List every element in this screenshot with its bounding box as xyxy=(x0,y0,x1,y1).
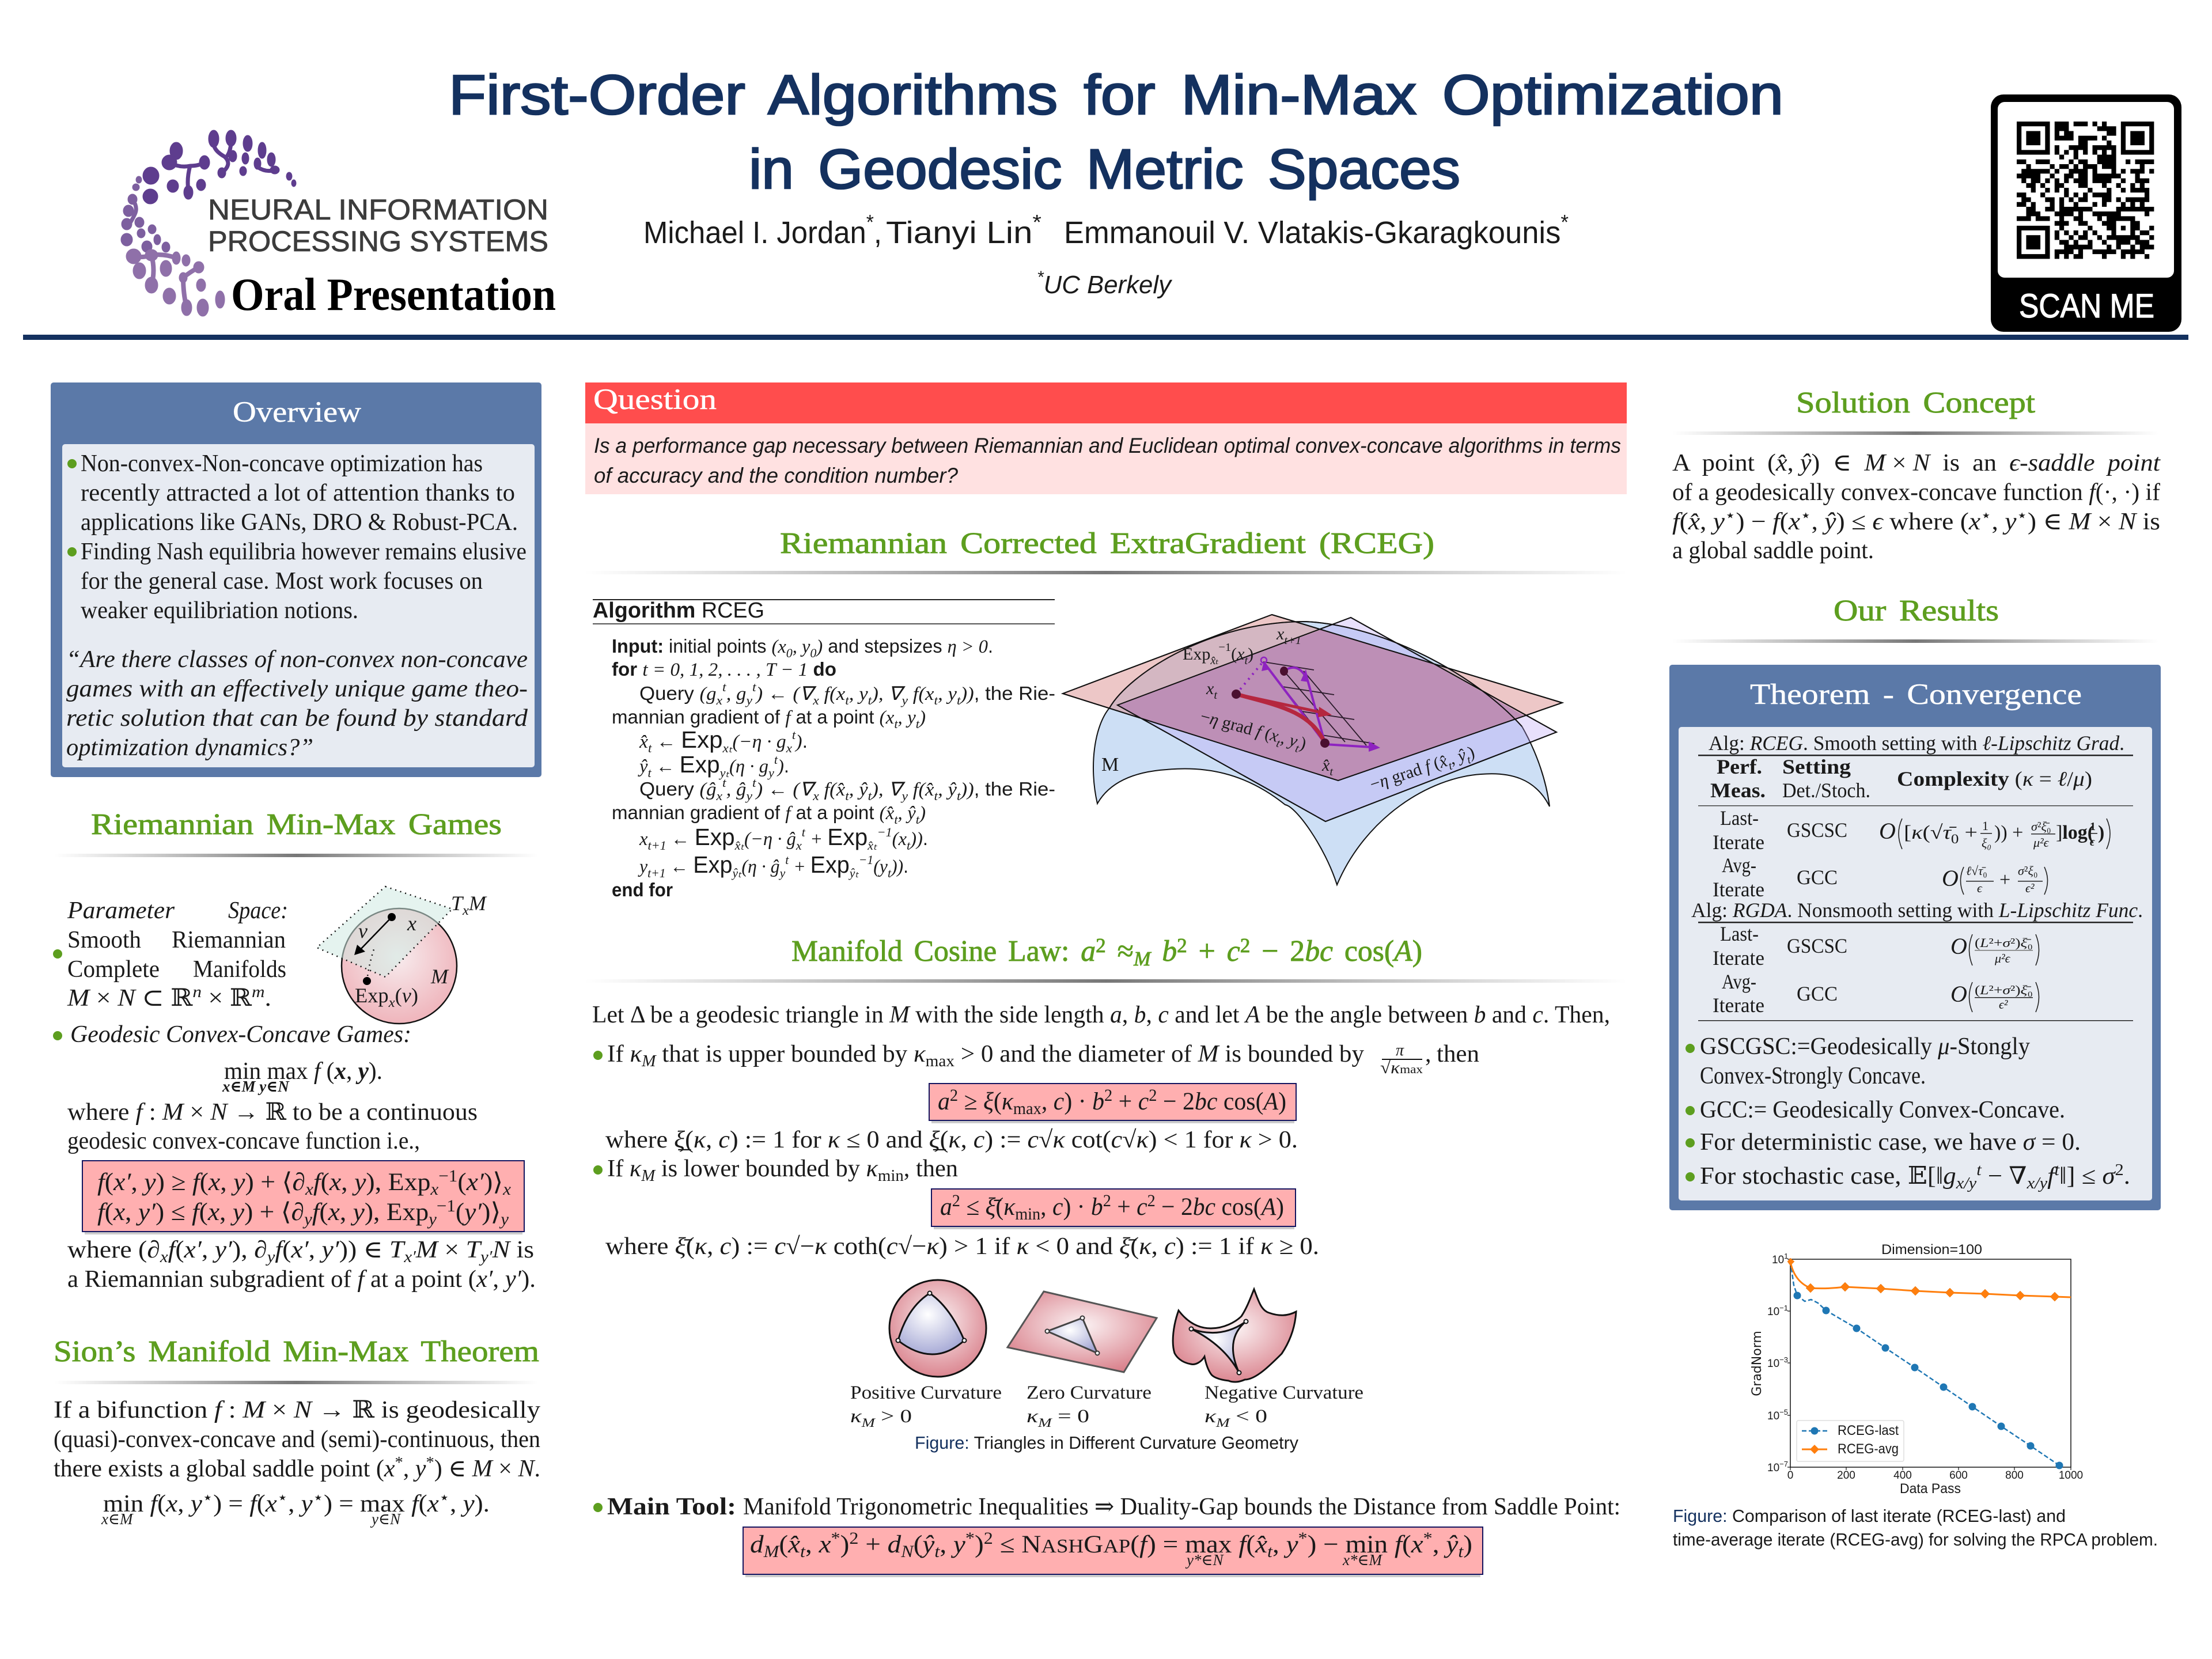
overview bullets: for the general case. Most work focuses on xyxy=(81,568,483,594)
diagram labels: xt xyxy=(1206,679,1218,702)
heading: Our Results: Our Results xyxy=(1834,594,1999,627)
axis titles: Data Pass xyxy=(1900,1481,1961,1497)
table: complexity results: Meas. xyxy=(1710,779,1766,802)
table: complexity results: Iterate xyxy=(1713,946,1764,969)
diagram labels: xt+1 xyxy=(1276,624,1301,647)
algorithm steps: end for xyxy=(612,879,673,900)
text: upper bound xyxy=(593,1041,1479,1077)
icon: sphere with tangent plane: v xyxy=(358,919,368,942)
panel: algorithm RCEG xyxy=(593,599,1055,900)
algorithm steps: yt+1 ← Expŷₜ(η · ĝyt + Expŷₜ−1(yt)). xyxy=(638,851,908,880)
logo: NeurIPS oral presentation xyxy=(122,131,556,320)
axis tick labels xyxy=(1767,1252,2083,1482)
authors: Michael I. Jordan*, xyxy=(643,210,882,250)
text: Sion's theorem statement: min f(x, y⋆) = f(x⋆, y⋆) = max f(x⋆, y). xyxy=(103,1489,490,1517)
text: Sion's theorem statement: If a bifunction f : M × N → ℝ is geodesically xyxy=(54,1397,540,1423)
diagram labels: −η grad f (xt, yt) xyxy=(1198,707,1308,756)
text: Sion's theorem statement: x∈M xyxy=(101,1510,134,1528)
algorithm title: Algorithm RCEG xyxy=(593,599,764,623)
diagram labels: M xyxy=(1101,754,1119,775)
logo text: PROCESSING SYSTEMS xyxy=(208,225,548,257)
callout: duality gap inequality: x*∈M xyxy=(1342,1551,1382,1569)
figure: RCEG manifold diagram xyxy=(1063,615,1562,885)
algorithm steps: Query (gxt, gyt) ← (∇x f(xt, yt), ∇y f(xt, yt)), the Rie- xyxy=(639,680,1055,707)
table: complexity results: Perf. xyxy=(1717,755,1762,778)
formula: last iterate, smooth: ) xyxy=(2098,822,2104,843)
algorithm steps xyxy=(612,635,1055,900)
curvature labels: Positive Curvature xyxy=(850,1382,1002,1403)
formula: average iterate, nonsmooth xyxy=(1950,981,2039,1012)
text: theorem notes xyxy=(1685,1033,2130,1192)
text: Sion's theorem statement xyxy=(54,1397,540,1528)
text: Sion's theorem statement: there exists a global saddle point (x*, y*) ∈ M × N. xyxy=(54,1454,540,1482)
tangent plane: lavender xyxy=(1118,618,1556,821)
QR code card xyxy=(1991,94,2181,332)
callout: duality gap inequality: dM(x̂t, x*)2 + dN(ŷt, y*)2 ≤ NASHGAP(f) = max f(x̂t, y*) − min f(x*, ŷt) xyxy=(750,1529,1472,1561)
table: complexity results: Complexity (κ = ℓ/μ) xyxy=(1897,767,2092,790)
algorithm steps: mannian gradient of f at a point (x̂t, ŷt) xyxy=(612,802,926,827)
formula: average iterate, smooth: σ²ξ₀ xyxy=(2018,863,2038,878)
text: solution concept: a global saddle point. xyxy=(1672,537,1874,564)
text: theorem notes: For deterministic case, we have σ = 0. xyxy=(1700,1129,2081,1156)
heading: Overview: Overview xyxy=(233,396,361,429)
text: parameter space: Parameter xyxy=(67,897,175,924)
table: complexity results: GSCSC xyxy=(1787,934,1847,957)
callout: geodesic convexity equations: f(x, y′) ≤ f(x, y) + ⟨∂yf(x, y), Expy−1(y′)⟩y xyxy=(97,1197,509,1229)
text: solution concept xyxy=(1672,450,2161,564)
curvature labels: κM = 0 xyxy=(1027,1406,1089,1430)
formula: last iterate, smooth: σ²ξ̄₀ xyxy=(2031,819,2051,834)
text: geodesic convex-concave games: min max f (x, y). xyxy=(224,1058,382,1085)
text: parameter space: M × N ⊂ ℝ n × ℝ m. xyxy=(67,983,271,1012)
algorithm steps: ŷt ← Expyₜ(η · gyt). xyxy=(638,751,789,780)
algorithm steps: xt+1 ← Expx̂ₜ(−η · ĝxt + Expx̂ₜ−1(xt)). xyxy=(639,824,928,853)
text: geodesic convex-concave games: Geodesic Convex-Concave Games: xyxy=(70,1021,411,1048)
axis tick labels: 10−3 xyxy=(1767,1355,1788,1370)
text: upper bound: then xyxy=(1437,1041,1479,1067)
figure caption: chart: Figure: Comparison of last iterate (RCEG-last) and xyxy=(1673,1506,2066,1526)
algorithm steps: for t = 0, 1, 2, . . . , T − 1 do xyxy=(612,658,836,680)
series: RCEG-last xyxy=(1790,1261,2063,1469)
title: First-Order Algorithms for Min-Max Optimization xyxy=(449,63,1783,126)
heading: Sion's theorem: Sion’s Manifold Min-Max Theorem xyxy=(54,1335,539,1368)
text: theorem notes: For stochastic case, 𝔼[‖ gx/yt − ∇x/yft‖] ≤ σ2. xyxy=(1700,1161,2130,1192)
icon: neural dot arc xyxy=(122,131,296,316)
panel: Overview xyxy=(51,382,541,777)
text: lower bound: If κM is lower bounded by κmin, then xyxy=(607,1156,958,1185)
formula: last iterate, smooth: ξ₀ xyxy=(1982,836,1991,850)
icon: sphere with tangent plane: x xyxy=(407,912,416,935)
series: RCEG-avg xyxy=(1787,1258,2071,1301)
text: question: Is a performance gap necessary between Riemannian and Euclidean optimal convex-concave algorithms in terms xyxy=(594,434,1621,457)
callout: lower bound inequality: a2 ≤ ξ̄(κmin, c) · b2 + c2 − 2bc cos(A) xyxy=(940,1192,1284,1224)
tangent plane: pink xyxy=(1063,615,1562,781)
text: upper bound: π xyxy=(1396,1041,1404,1059)
formula: last iterate, smooth: 1 xyxy=(2090,820,2096,833)
figure: curvature triangles xyxy=(850,1280,1363,1453)
formula: average iterate, smooth: ϵ² xyxy=(2025,881,2035,895)
text: geodesic convex-concave games: geodesic convex-concave function i.e., xyxy=(67,1128,420,1154)
table: complexity results: Iterate xyxy=(1713,878,1764,901)
overview quote: games with an effectively unique game theo- xyxy=(66,676,528,702)
axis tick labels: 1000 xyxy=(2059,1469,2083,1482)
legend xyxy=(1797,1421,1904,1461)
formula: last iterate, nonsmooth: μ²ϵ xyxy=(1994,951,2011,965)
table: complexity results: Alg: RCEG. Smooth setting with ℓ-Lipschitz Grad. xyxy=(1709,732,2124,755)
axis tick labels: 600 xyxy=(1949,1469,1968,1482)
axis tick labels: 101 xyxy=(1772,1252,1788,1266)
geometric construction xyxy=(1232,657,1380,752)
overview bullets: applications like GANs, DRO & Robust-PCA. xyxy=(81,509,518,536)
title: in Geodesic Metric Spaces xyxy=(749,138,1460,200)
algorithm steps: mannian gradient of f at a point (xt, yt) xyxy=(612,706,926,731)
text: parameter space: Manifolds xyxy=(193,956,286,983)
table: complexity results: Iterate xyxy=(1713,994,1764,1017)
table: complexity results: GCC xyxy=(1797,866,1838,889)
text: geodesic convex-concave games: x∈M y∈N xyxy=(222,1078,290,1095)
icon: QR code xyxy=(2017,122,2154,259)
formula: last iterate, smooth: ]log( xyxy=(2056,822,2094,843)
text: upper bound: If κM that is upper bounded by κmax > 0 and the diameter of M is bounded by xyxy=(607,1041,1364,1070)
curvature labels: κM < 0 xyxy=(1205,1406,1267,1430)
text: solution concept: f(x̂, y⋆) − f(x⋆, ŷ) ≤ ϵ where ( x⋆, y⋆) ∈ M × N is xyxy=(1672,507,2160,535)
text: parameter space: Smooth xyxy=(67,927,141,953)
text: Sion's theorem statement: (quasi)-convex-concave and (semi)-continuous, then xyxy=(54,1426,540,1453)
text: xi definition: where ξ̲(κ, c) := 1 for κ ≤ 0 and ξ̲(κ, c) := c√κ cot(c√κ) < 1 for κ > 0. xyxy=(605,1127,1298,1153)
callout: duality gap inequality: y*∈N xyxy=(1185,1551,1224,1569)
callout: upper bound inequality: a2 ≥ ξ(κmax, c) · b2 + c2 − 2bc cos(A) xyxy=(938,1086,1286,1118)
panel: cosine law statements xyxy=(592,1002,1610,1260)
panel: Theorem - Convergence xyxy=(1669,665,2161,1210)
heading: Theorem - Convergence: Theorem - Convergence xyxy=(1750,679,2082,711)
formula: last iterate, smooth: )) + xyxy=(1994,822,2023,843)
table: complexity results: Setting xyxy=(1782,755,1851,778)
table: complexity results xyxy=(1691,732,2143,1021)
axis titles: GradNorm xyxy=(1750,1331,1764,1396)
text: question xyxy=(594,434,1621,487)
overview bullets: weaker equilibriation notions. xyxy=(81,597,358,624)
text: question: of accuracy and the condition number? xyxy=(594,464,958,487)
text: upper bound: √κmax xyxy=(1380,1058,1423,1077)
overview quote: optimization dynamics?” xyxy=(66,734,313,761)
text: theorem notes: GSCGSC:=Geodesically μ-Stongly xyxy=(1700,1033,2030,1060)
panel: Riemannian Min-Max Games xyxy=(53,808,538,1293)
text: subgradient definition xyxy=(67,1237,536,1293)
curvature labels xyxy=(850,1382,1363,1430)
formula: average iterate, smooth xyxy=(1942,863,2047,895)
table: complexity results: GSCSC xyxy=(1787,819,1847,842)
axis titles xyxy=(1750,1331,1961,1497)
callout: geodesic convexity equations: f(x′, y) ≥ f(x, y) + ⟨∂xf(x, y), Expx−1(x′)⟩x xyxy=(97,1167,511,1199)
heading: Solution Concept: Solution Concept xyxy=(1796,387,2036,419)
formula: average iterate, smooth: + xyxy=(1999,869,2010,891)
diagram labels: Expx̂ₜ−1(xt) xyxy=(1183,641,1253,667)
text: geodesic convex-concave games: where f : M × N → ℝ to be a continuous xyxy=(67,1099,478,1126)
curvature labels: Negative Curvature xyxy=(1205,1382,1363,1403)
logo text: Oral Presentation xyxy=(231,270,556,320)
axis tick labels: 400 xyxy=(1893,1469,1912,1482)
text: theorem notes: GCC:= Geodesically Convex-Concave. xyxy=(1700,1097,2065,1123)
legend: RCEG-avg xyxy=(1838,1441,1899,1457)
figure caption: chart: time-average iterate (RCEG-avg) for solving the RPCA problem. xyxy=(1673,1529,2158,1550)
table: complexity results: Det./Stoch. xyxy=(1782,779,1870,802)
panel: Solution Concept xyxy=(1672,387,2161,564)
curvature labels: Zero Curvature xyxy=(1027,1382,1152,1403)
heading: Riemannian Corrected ExtraGradient: Riemannian Corrected ExtraGradient (RCEG) xyxy=(780,527,1434,560)
table: complexity results: Last- xyxy=(1720,922,1759,945)
algorithm steps: x̂t ← Expxₜ(−η · gxt). xyxy=(639,726,808,755)
icon: positive curvature xyxy=(889,1280,986,1377)
text: upper bound: , xyxy=(1425,1041,1431,1067)
heading: Riemannian Min-Max Games: Riemannian Min-Max Games xyxy=(91,808,502,841)
text: xi-bar definition: where ξ̄(κ, c) := c√−κ coth(c√−κ) > 1 if κ < 0 and ξ̄(κ, c) := 1 if κ ≥ 0. xyxy=(605,1233,1319,1260)
formula: average iterate, smooth: ϵ xyxy=(1977,881,1983,895)
icon: zero curvature xyxy=(1007,1291,1157,1372)
authors: Emmanouil V. Vlatakis-Gkaragkounis* xyxy=(1064,210,1569,250)
diagram labels: −η grad f (x̂t, ŷt) xyxy=(1368,743,1478,797)
formula: last iterate, nonsmooth: (L²+σ²)ξ̄₀ xyxy=(1975,935,2033,950)
algorithm steps: Query (ĝxt, ĝyt) ← (∇x f(x̂t, ŷt), ∇y f(x̂t, ŷt)), the Rie- xyxy=(639,775,1055,803)
text: Sion's theorem statement: y∈N xyxy=(370,1510,402,1528)
text: geodesic convex-concave games xyxy=(53,1021,478,1154)
overview quote xyxy=(66,646,528,761)
formula: last iterate, nonsmooth: O xyxy=(1950,933,1967,959)
axis tick labels: 10−1 xyxy=(1767,1304,1788,1318)
formula: average iterate, smooth: ℓ√τ̄₀ xyxy=(1966,863,1987,878)
formula: last iterate, smooth: ϵ xyxy=(2090,836,2095,849)
icon: sphere with tangent plane: TxM xyxy=(451,892,487,918)
table: complexity results: Avg- xyxy=(1722,970,1756,993)
icon: sphere with tangent plane xyxy=(317,887,487,1024)
legend: RCEG-last xyxy=(1838,1423,1899,1438)
manifold surface xyxy=(1093,622,1550,885)
authors xyxy=(643,210,1569,250)
formula: last iterate, smooth: [κ(√τ̄0 + xyxy=(1904,822,1978,847)
text: parameter space: Space: xyxy=(228,897,288,924)
text: parameter space: Complete xyxy=(67,956,160,983)
plane overlap xyxy=(1118,630,1524,781)
icon: sphere with tangent plane: M xyxy=(430,965,449,988)
overview bullets: Finding Nash equilibria however remains elusive xyxy=(81,539,527,565)
overview quote: retic solution that can be found by standard xyxy=(66,705,528,732)
heading: Question: Question xyxy=(593,384,717,416)
icon: negative curvature xyxy=(1173,1289,1296,1382)
logo text: NEURAL INFORMATION xyxy=(208,194,548,226)
formula: last iterate, smooth: μ²ϵ xyxy=(2033,835,2050,850)
text: subgradient definition: a Riemannian subgradient of f at a point (x′, y′). xyxy=(67,1266,536,1293)
panel: Question xyxy=(585,382,1627,494)
text: main tool: Manifold Trigonometric Inequalities ⇒ Duality-Gap bounds the Distance from Saddle Point: xyxy=(743,1494,1620,1520)
text: solution concept: of a geodesically convex-concave function f(·, ·) if xyxy=(1672,479,2160,506)
formula: average iterate, nonsmooth: ϵ² xyxy=(1999,997,2008,1012)
formula: last iterate, smooth xyxy=(1879,818,2110,850)
text: subgradient definition: where (∂ xf(x′, y′), ∂yf(x′, y′)) ∈ Tx′M × Ty′N is xyxy=(67,1237,534,1266)
callout: geodesic convexity equations xyxy=(82,1161,524,1234)
authors: Tianyi Lin * xyxy=(886,210,1041,250)
table: complexity results: GCC xyxy=(1797,982,1838,1005)
chart: gradient norm vs data pass xyxy=(1750,1242,2083,1497)
formula: average iterate, smooth: O xyxy=(1942,865,1959,891)
heading: Manifold Cosine Law: Manifold Cosine Law: a2 ≈M b2 + c2 − 2bc cos(A) xyxy=(791,934,1422,970)
scan me label: SCAN ME xyxy=(2019,287,2154,325)
chart title: Dimension=100 xyxy=(1881,1242,1982,1257)
panel: Sion's Manifold Min-Max Theorem xyxy=(54,1335,540,1528)
diagram labels xyxy=(1101,624,1478,797)
figure caption: Figure: Triangles in Different Curvature Geometry xyxy=(915,1433,1298,1453)
axis tick labels: 0 xyxy=(1787,1469,1793,1482)
axis tick labels: 800 xyxy=(2005,1469,2024,1482)
text: solution concept: A point (x̂, ŷ) ∈ M × N is an ϵ-saddle point xyxy=(1672,450,2161,476)
overview bullets: recently attracted a lot of attention thanks to xyxy=(81,480,515,506)
table: complexity results: Iterate xyxy=(1713,831,1764,854)
text: theorem notes: Convex-Strongly Concave. xyxy=(1700,1063,1926,1089)
diagram labels: x̂t xyxy=(1321,756,1334,778)
overview bullets: Non-convex-Non-concave optimization has xyxy=(81,450,483,477)
affiliation: *UC Berkely xyxy=(1037,268,1173,299)
text: parameter space: Riemannian xyxy=(172,927,286,953)
formula: average iterate, nonsmooth: (L²+σ²)ξ̄₀ xyxy=(1975,983,2033,997)
formula: last iterate, smooth: 1 xyxy=(1982,819,1988,833)
curvature labels: κM > 0 xyxy=(850,1406,912,1430)
formula: average iterate, nonsmooth: O xyxy=(1950,981,1967,1007)
axis tick labels: 10−7 xyxy=(1767,1460,1788,1474)
text: triangle definition: Let Δ be a geodesic triangle in M with the side length a, b, c and let A be the angle between b and c. Then, xyxy=(592,1002,1610,1028)
table: complexity results: Last- xyxy=(1720,806,1759,830)
text: main tool: Main Tool: xyxy=(607,1494,736,1520)
figure caption: chart xyxy=(1673,1506,2158,1550)
algorithm steps: Input: initial points (x0, y0) and stepsizes η > 0. xyxy=(612,635,993,660)
overview quote: “Are there classes of non-convex non-concave xyxy=(66,646,528,673)
table: complexity results: Alg: RGDA. Nonsmooth setting with L-Lipschitz Func. xyxy=(1691,899,2143,922)
icon: sphere with tangent plane: Expx(v) xyxy=(355,984,418,1010)
logo text xyxy=(208,194,556,320)
formula: last iterate, nonsmooth xyxy=(1950,933,2039,965)
formula: last iterate, smooth: O xyxy=(1879,818,1896,844)
title xyxy=(449,63,1783,200)
callout: duality gap inequality xyxy=(743,1527,1483,1577)
overview bullets xyxy=(67,450,527,624)
axis tick labels: 10−5 xyxy=(1767,1408,1788,1422)
axis tick labels: 200 xyxy=(1837,1469,1855,1482)
panel: main tool xyxy=(593,1494,1620,1577)
table: complexity results: Avg- xyxy=(1722,854,1756,877)
text: parameter space xyxy=(53,897,288,1012)
